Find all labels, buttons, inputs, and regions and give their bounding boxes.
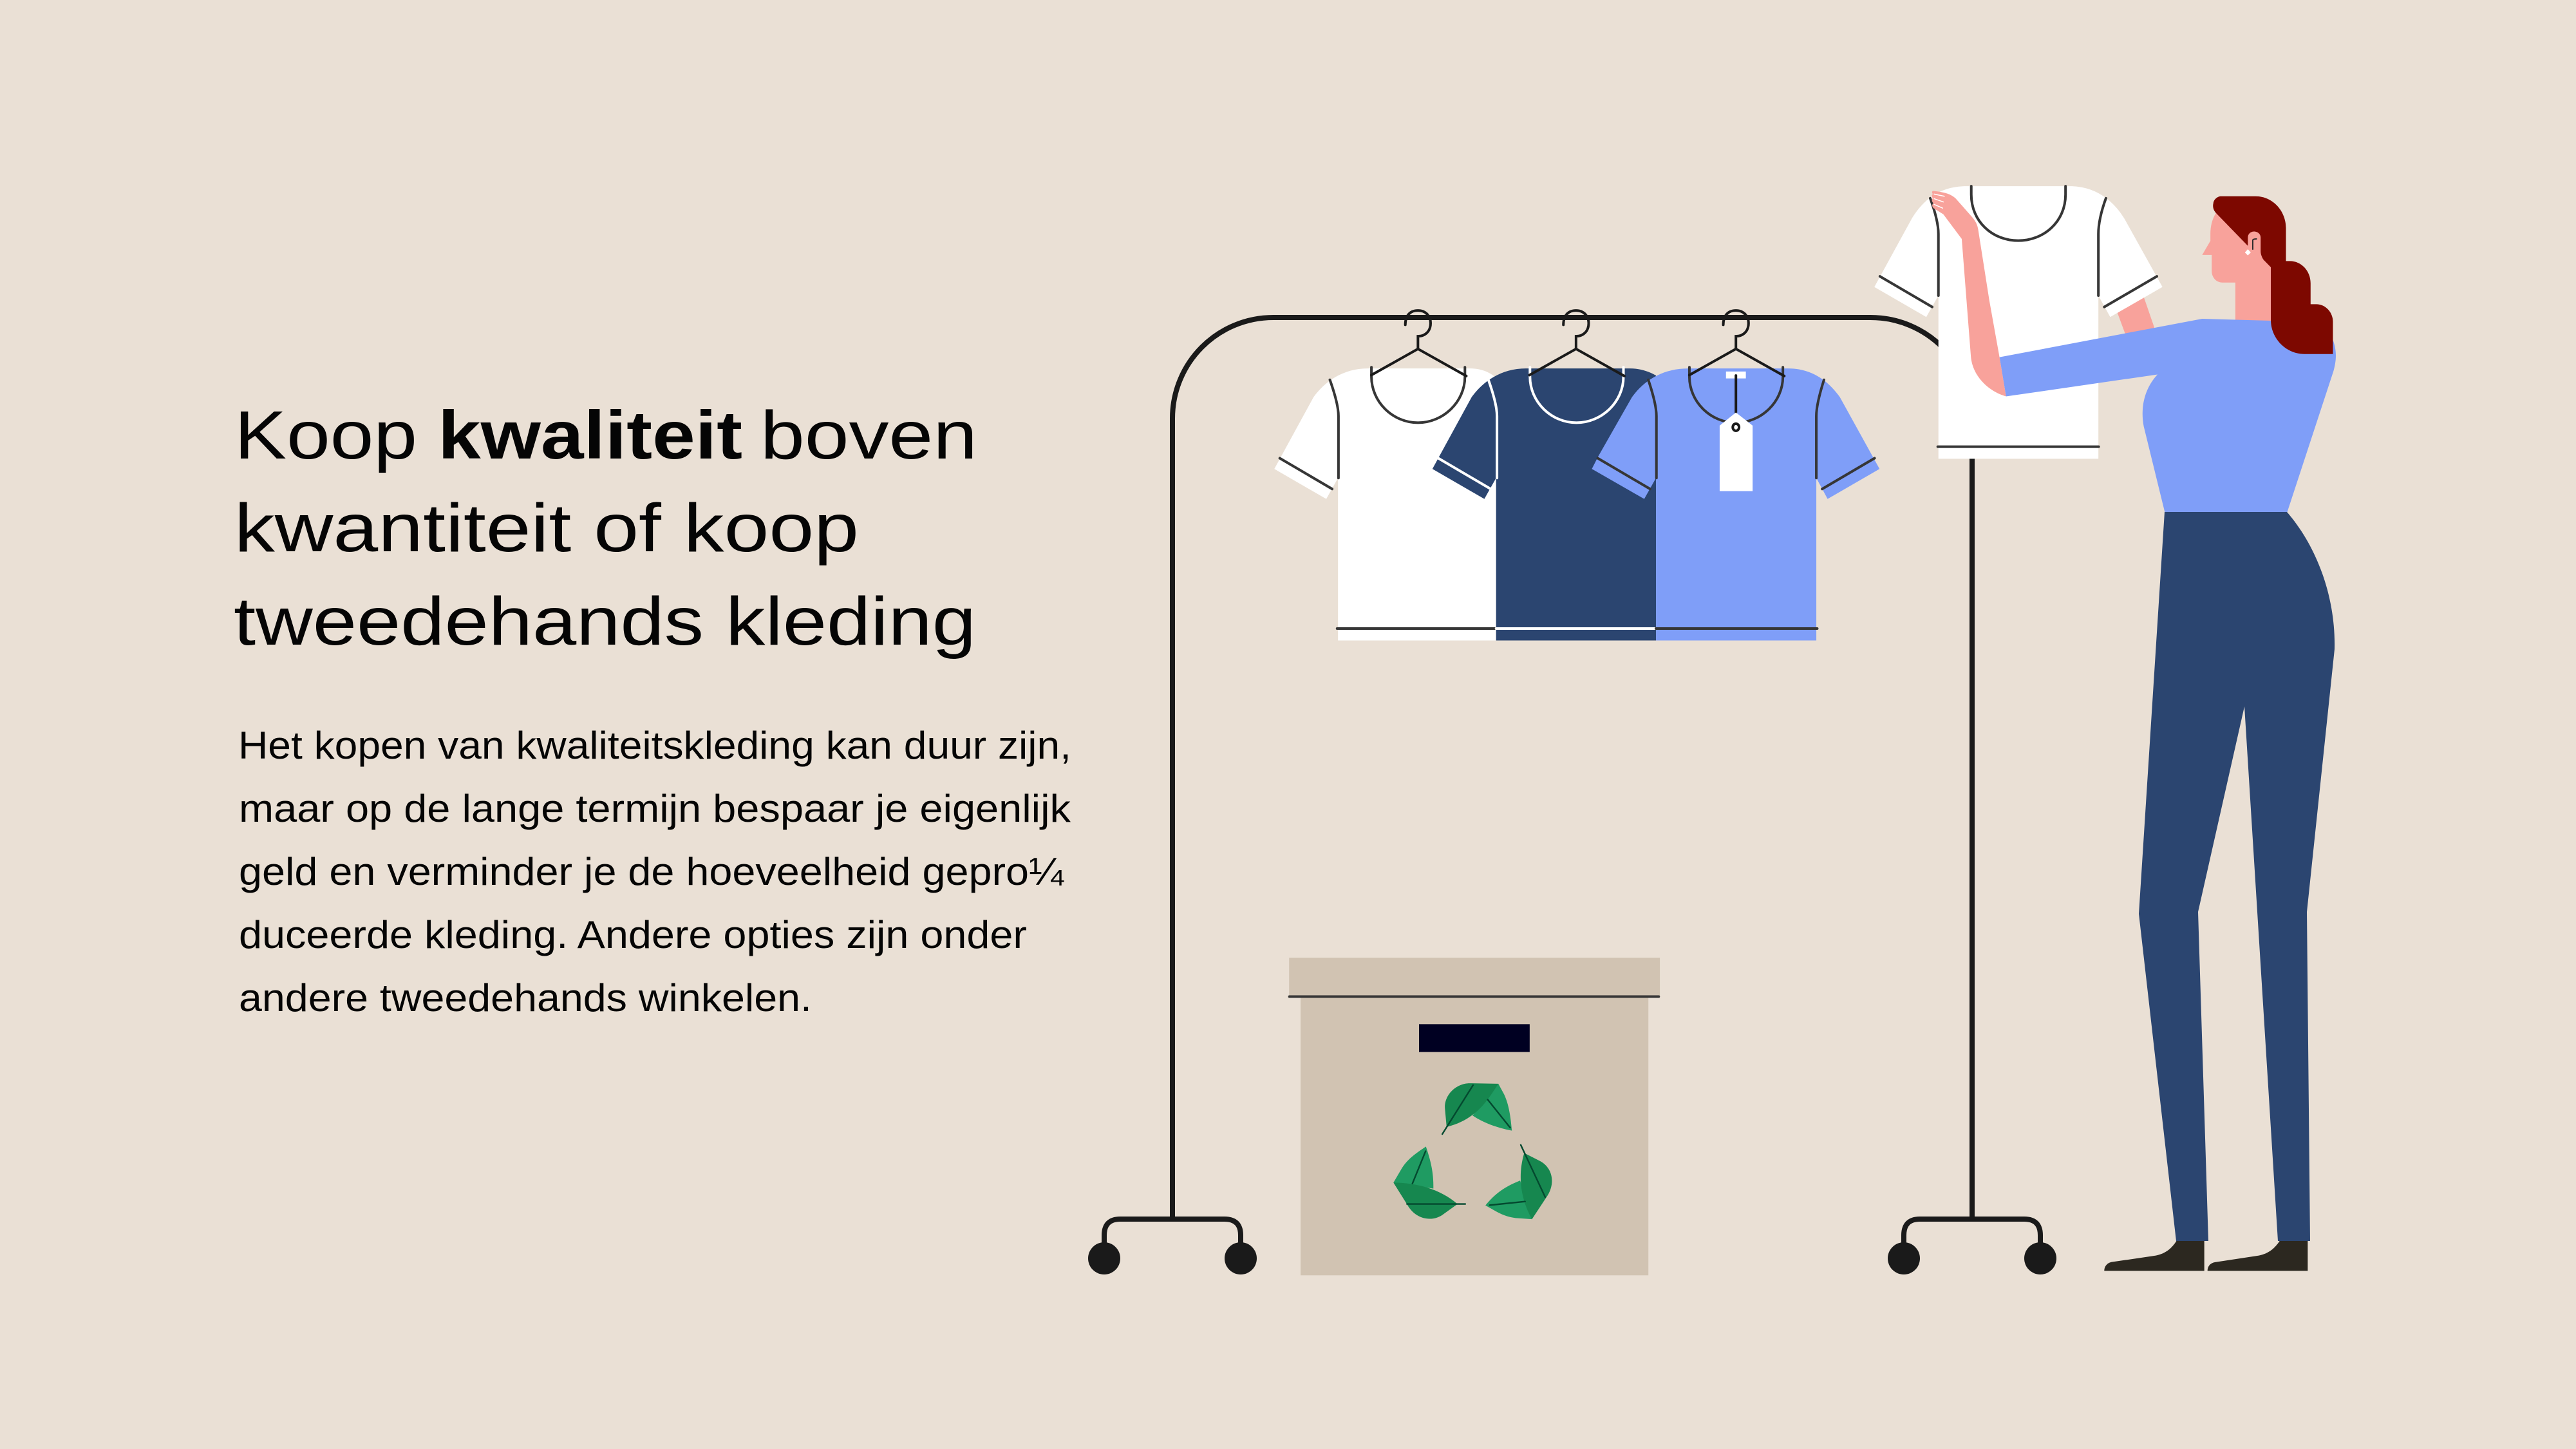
title: boven — [760, 397, 977, 473]
body text: geld en verminder je de hoeveelheid gepro¼ — [239, 850, 1064, 893]
box body — [1301, 996, 1648, 1275]
title: kwantiteit of koop — [234, 490, 859, 566]
earring — [2245, 239, 2257, 256]
body text: Het kopen van kwaliteitskleding kan duur zijn, — [238, 724, 1071, 767]
box label — [1419, 1024, 1530, 1052]
storage box with recycling leaves — [1289, 958, 1660, 1275]
body text — [238, 724, 1071, 1019]
hair — [2213, 196, 2333, 354]
near arm and hand — [1932, 191, 2006, 397]
hangers — [1371, 310, 1784, 376]
title: tweedehands kleding — [234, 583, 976, 659]
clothing rack — [1088, 317, 2056, 1274]
hanging shirts — [1274, 310, 1879, 640]
title: kwaliteit — [438, 397, 742, 473]
body text: maar op de lange termijn bespaar je eigenlijk — [239, 787, 1071, 830]
sweater — [2000, 319, 2336, 512]
far arm — [2118, 297, 2155, 335]
price tag — [1720, 372, 1753, 491]
face and neck — [2202, 213, 2273, 323]
held shirt — [1874, 186, 2163, 459]
title — [234, 397, 977, 659]
shoes — [2104, 1241, 2308, 1271]
body text: andere tweedehands winkelen. — [239, 976, 812, 1019]
periwinkle shirt — [1592, 367, 1879, 640]
icon: recycling leaves — [1393, 1083, 1552, 1219]
title: Koop — [234, 397, 417, 473]
body text: duceerde kleding. Andere opties zijn onder — [239, 913, 1027, 956]
trousers — [2139, 512, 2335, 1241]
white shirt — [1274, 367, 1496, 640]
woman holding shirt — [1874, 186, 2336, 1271]
navy shirt — [1433, 367, 1656, 640]
box lid — [1289, 958, 1660, 996]
